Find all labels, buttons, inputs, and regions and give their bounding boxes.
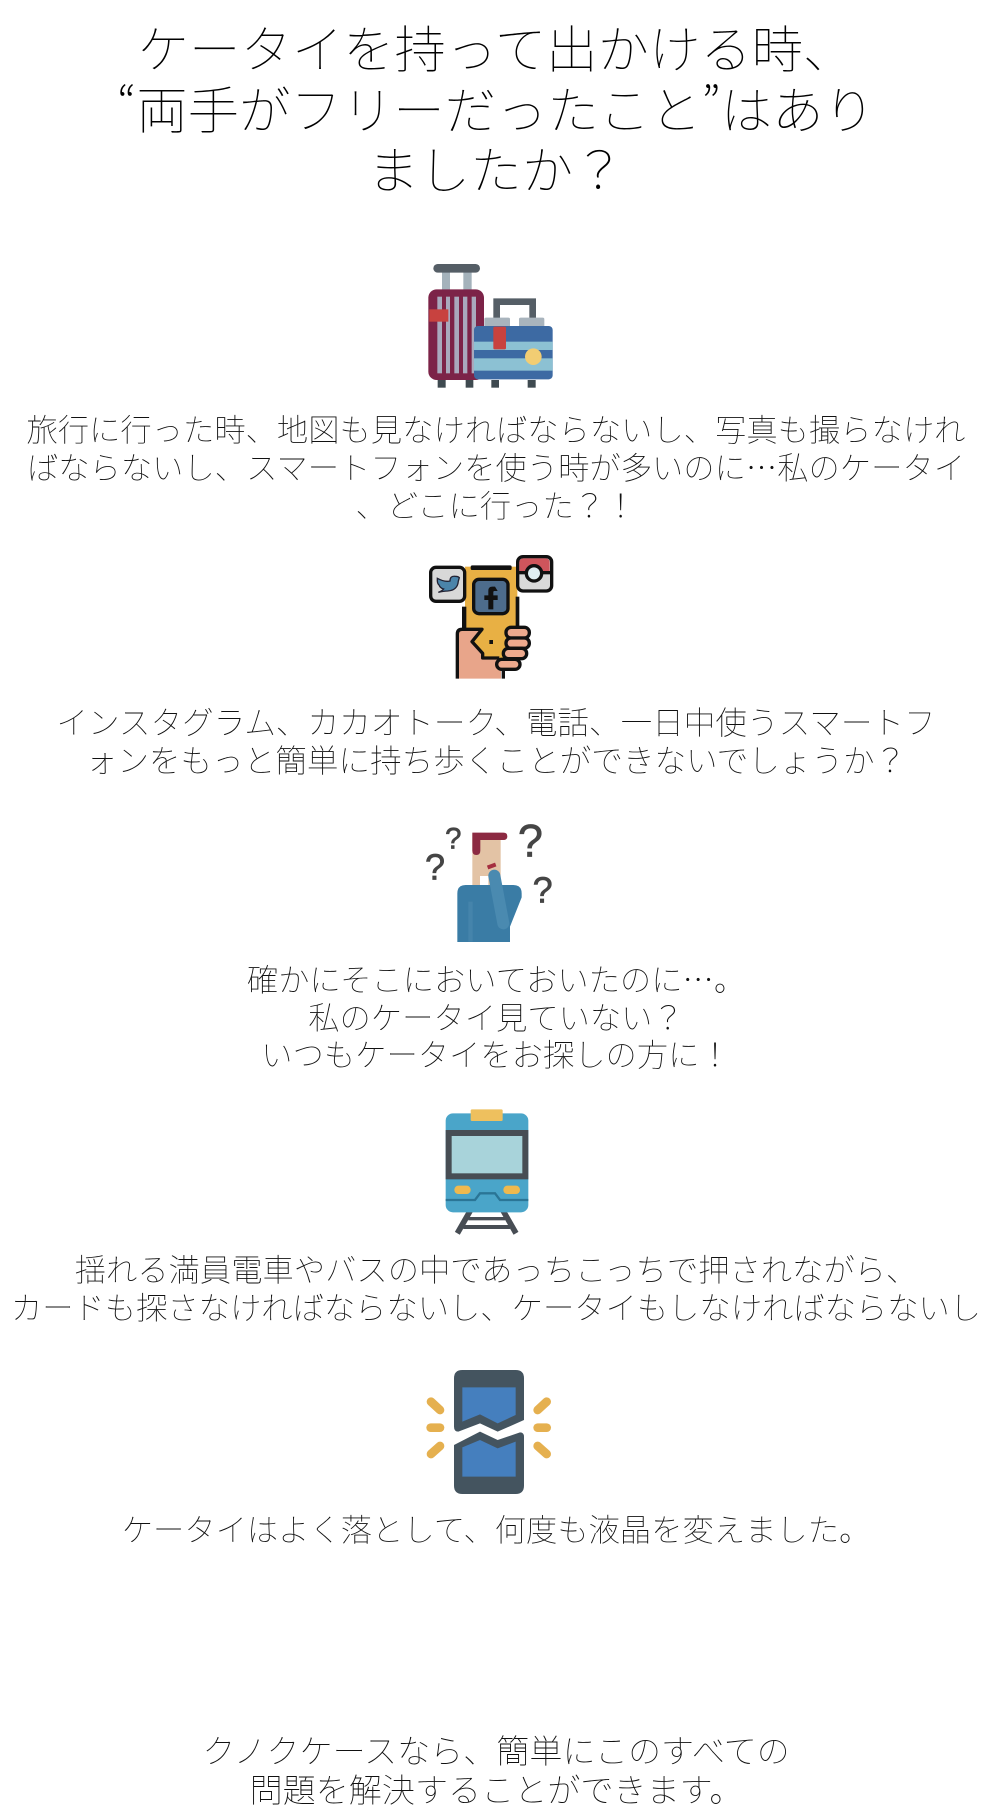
text: travel: ばならないし、スマートフォンを使う時が多いのに…私のケータイ bbox=[27, 444, 965, 489]
text: travel: 、どこに行った？！ bbox=[356, 489, 636, 524]
text: conclusion: クノクケースなら、簡単にこのすべての bbox=[202, 1734, 790, 1771]
text: where is my phone: 私のケータイ見ていない？ bbox=[308, 1000, 684, 1036]
icon: confused man: ? bbox=[533, 869, 553, 910]
icon: suitcases bbox=[428, 264, 553, 388]
title bbox=[117, 21, 875, 200]
text: dropped phone: ケータイはよく落として、何度も液晶を変えました。 bbox=[122, 1513, 870, 1548]
text: conclusion bbox=[202, 1734, 790, 1810]
text: conclusion: 問題を解決することができます。 bbox=[250, 1773, 742, 1810]
text: travel: 旅行に行った時、地図も見なければならないし、写真も撮らなけれ bbox=[27, 413, 965, 448]
icon: train bbox=[446, 1109, 528, 1235]
text: crowded train: 揺れる満員電車やバスの中であっちこっちで押されながら、 bbox=[75, 1253, 917, 1288]
text: crowded train bbox=[11, 1253, 981, 1326]
text: apps all day: インスタグラム、カカオトーク、電話、一日中使うスマートフ bbox=[56, 705, 936, 741]
text: where is my phone bbox=[247, 956, 745, 1073]
text: where is my phone: いつもケータイをお探しの方に！ bbox=[261, 1038, 731, 1073]
title: ケータイを持って出かける時、 bbox=[138, 21, 854, 79]
text: apps all day bbox=[56, 705, 936, 779]
title: “両手がフリーだったこと”はあり bbox=[117, 68, 875, 144]
icon: broken phone bbox=[426, 1370, 551, 1494]
icon: confused man: ? bbox=[425, 847, 445, 888]
text: travel bbox=[27, 413, 965, 524]
icon: phone in hand with apps bbox=[429, 555, 554, 679]
icon: confused man: ? bbox=[518, 816, 543, 867]
icon: confused man: ? bbox=[445, 822, 461, 855]
title: ましたか？ bbox=[368, 142, 624, 200]
text: crowded train: カードも探さなければならないし、ケータイもしなければならないし bbox=[11, 1291, 981, 1326]
text: where is my phone: 確かにそこにおいておいたのに…。 bbox=[247, 956, 745, 1001]
icon: confused man bbox=[425, 816, 553, 942]
text: apps all day: ォンをもっと簡単に持ち歩くことができないでしょうか？ bbox=[86, 743, 906, 779]
